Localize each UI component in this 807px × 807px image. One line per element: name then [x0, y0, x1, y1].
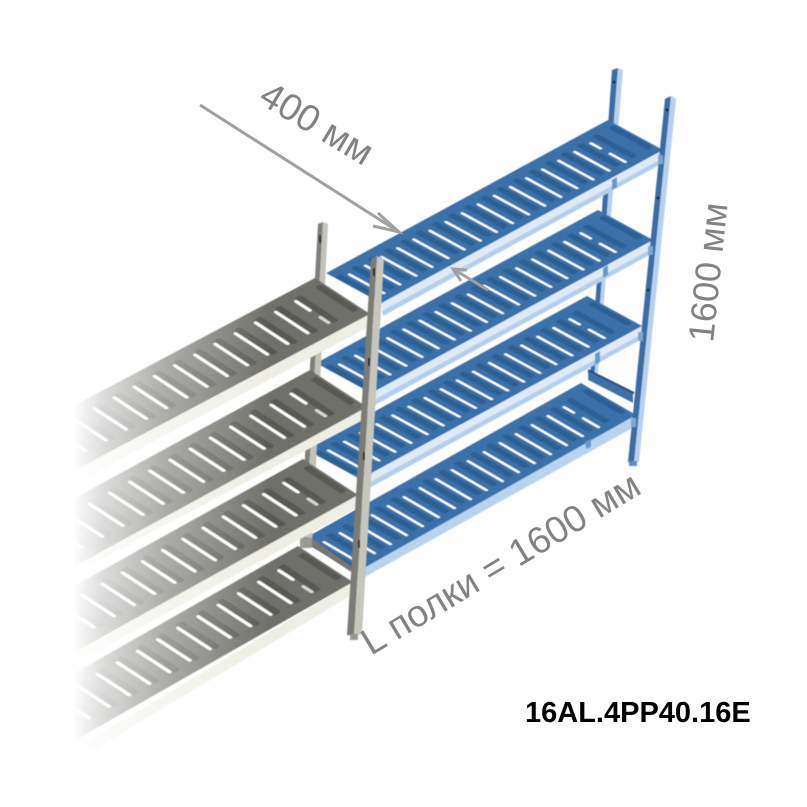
blue front post [628, 96, 676, 466]
grey shelf 2 [0, 370, 367, 581]
blue shelf 1 [326, 120, 663, 316]
blue shelf 4 [301, 383, 636, 582]
label: height: 1600 мм [680, 201, 736, 344]
product code: 16AL.4PP40.16E [525, 697, 751, 729]
grey shelving unit [0, 222, 384, 770]
blue back post [585, 68, 623, 447]
blue shelf 4 back rail [584, 369, 634, 410]
arrow: 400 mm width bottom [453, 269, 488, 290]
grey shelf 4 back rail [300, 536, 351, 582]
blue shelf 2 [316, 210, 653, 406]
label: shelf depth: 400 мм [253, 73, 381, 173]
grey shelf 1 [4, 278, 370, 491]
arrow: 400 mm width top [200, 105, 399, 232]
blue shelving unit [301, 68, 676, 582]
grey shelf 4 [0, 546, 355, 770]
grey back post [300, 222, 328, 545]
grey shelf 3 [0, 459, 358, 672]
blue shelf 3 [305, 296, 642, 492]
grey fade overlay [0, 200, 270, 790]
label: shelf length: L полки = 1600 мм [353, 463, 647, 663]
grey front post [347, 256, 384, 640]
